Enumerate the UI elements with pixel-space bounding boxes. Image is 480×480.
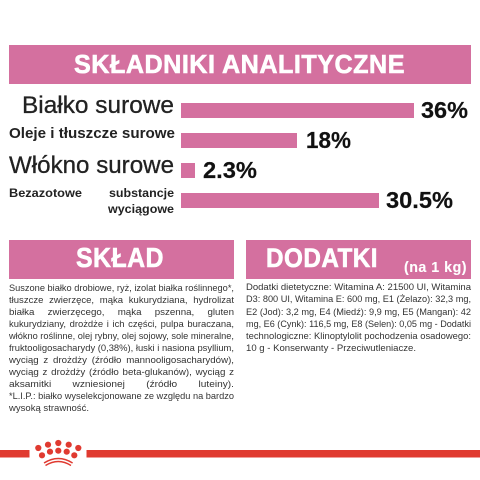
row: Bezazotowe substancje wyciągowe: wyciągowe [107, 204, 174, 216]
text block: dodatki: 10 g - Konserwanty - Przeciwutleniacze. [246, 343, 416, 353]
heading: skład [9, 240, 234, 279]
heading: dodatki [246, 240, 471, 279]
row: Oleje i tłuszcze surowe [9, 125, 351, 153]
heading: dodatki: (na 1 kg) [404, 260, 467, 276]
text block: skład: wyciąg z drożdży (źródło beta-glukanów), wyciąg z [8, 367, 234, 377]
row: Włókno surowe: 2.3% [203, 157, 257, 183]
heading: skład: SKŁAD [76, 242, 164, 273]
heading: dodatki: DODATKI [266, 243, 378, 273]
icon: royal crown [35, 440, 81, 466]
text block: dodatki: Dodatki dietetyczne: Witamina A: 21500 UI, Witamina [246, 282, 472, 292]
text block: dodatki: technologiczne: Klinoptylolit pochodzenia osadowego: [246, 331, 471, 341]
row: Bezazotowe substancje wyciągowe [9, 187, 453, 216]
row: Bezazotowe substancje wyciągowe: substancje [109, 188, 174, 200]
row: Bezazotowe substancje wyciągowe: Bezazotowe [9, 188, 82, 200]
text block: skład: *L.I.P.: białko wyselekcjonowane ze względu na bardzo [9, 391, 234, 401]
row: Białko surowe: Białko surowe [22, 92, 174, 119]
text block: skład: tłuszcze zwierzęce, mąka kukurydziana, hydrolizat [9, 295, 234, 305]
text block: dodatki [246, 282, 472, 353]
footer line with crown logo [0, 440, 480, 466]
panel: dodatki [246, 240, 472, 353]
text block: dodatki: E2 (Jod): 3,2 mg, E4 (Miedź): 9,9 mg, E5 (Mangan): 42 [246, 307, 471, 317]
text block: skład: fruktooligosacharydy (0,38%), łuski i nasiona psyllium, [9, 343, 234, 353]
panel: skład [8, 240, 234, 413]
row: Włókno surowe: Włókno surowe [9, 152, 174, 179]
text block: skład: włókno roślinne, olej rybny, olej sojowy, sole mineralne, [8, 331, 234, 341]
text block: dodatki: mg, E6 (Cynk): 116,5 mg, E8 (Selen): 0,05 mg - Dodatki [246, 319, 471, 329]
text block: skład: kukurydziany, drożdże i ich części, pulpa buraczana, [9, 319, 234, 329]
text block: skład: wysoką strawność. [8, 403, 89, 413]
text block: skład: wyciąg z drożdży (źródło mannooligosacharydów), [8, 355, 234, 365]
bar chart: analytical components [9, 92, 468, 216]
title banner: SKŁADNIKI ANALITYCZNE [74, 51, 405, 79]
text block: skład: Suszone białko drobiowe, ryż, izolat białka roślinnego*, [9, 283, 234, 293]
text block: skład: białka zwierzęcego, mąka pszenna, gluten [9, 307, 234, 317]
row: Białko surowe: 36% [421, 97, 468, 123]
row: Oleje i tłuszcze surowe: 18% [306, 127, 351, 153]
row: Bezazotowe substancje wyciągowe: 30.5% [386, 187, 453, 213]
title banner [9, 45, 471, 84]
text block: dodatki: D3: 800 UI, Witamina E: 600 mg, E1 (Żelazo): 32,3 mg, [246, 294, 471, 304]
text block: skład: aksamitki wzniesionej (źródło luteiny). [9, 379, 234, 389]
text block: skład [8, 283, 234, 413]
row: Oleje i tłuszcze surowe: Oleje i tłuszcze surowe [9, 125, 175, 142]
row: Włókno surowe [9, 152, 257, 183]
row: Białko surowe [22, 92, 468, 123]
